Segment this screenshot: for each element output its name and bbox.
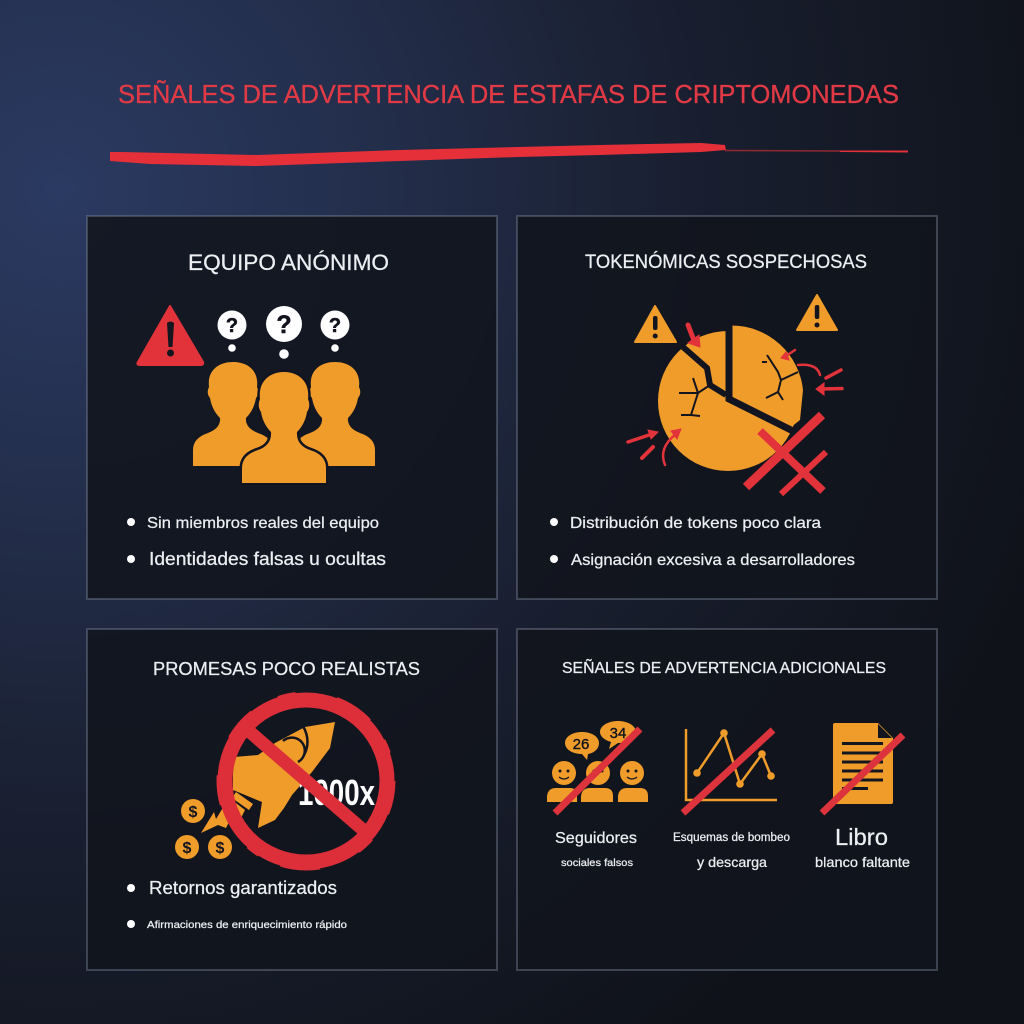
icon: rocket with coins: [175, 722, 335, 859]
caption: pump and dump: y descarga: [697, 854, 767, 870]
caption: fake followers: sociales falsos: [561, 857, 633, 869]
icon: question marks: ?: [226, 315, 238, 337]
bullet list: Identidades falsas u ocultas: [149, 549, 386, 569]
heading: SEÑALES DE ADVERTENCIA ADICIONALES: [562, 660, 886, 677]
icon: red warning triangle: [137, 306, 203, 365]
bullet list: [127, 515, 386, 569]
heading: TOKENÓMICAS SOSPECHOSAS: [585, 251, 867, 273]
heading: PROMESAS POCO REALISTAS: [153, 658, 420, 679]
icon: rocket with coins: $: [216, 840, 225, 857]
1000x label: 1000x: [298, 772, 375, 813]
bullet list: [127, 878, 347, 931]
bullet list: Distribución de tokens poco clara: [570, 515, 821, 532]
icon: cracked pie chart: [658, 320, 803, 471]
icon: question marks: ?: [329, 315, 341, 337]
bullet list: Asignación excesiva a desarrolladores: [571, 552, 855, 569]
heading: EQUIPO ANÓNIMO: [188, 250, 389, 275]
caption: missing whitepaper: [815, 824, 910, 870]
caption: pump and dump: Esquemas de bombeo: [673, 832, 790, 844]
icon: missing whitepaper: [822, 723, 903, 813]
panel: tokenómicas sospechosas: [517, 216, 937, 599]
caption: fake followers: Seguidores: [555, 830, 637, 847]
icon: rocket with coins: $: [189, 804, 198, 821]
caption: missing whitepaper: Libro: [835, 824, 888, 850]
bullet list: Afirmaciones de enriquecimiento rápido: [147, 919, 347, 931]
icon: question marks: ?: [276, 311, 292, 339]
panel: promesas poco realistas: [87, 629, 497, 970]
icon: red arrows: [628, 325, 842, 465]
bullet list: Sin miembros reales del equipo: [147, 515, 379, 532]
icon: fake followers: 34: [610, 725, 626, 742]
panel: señales adicionales: [517, 629, 937, 970]
title: SEÑALES DE ADVERTENCIA DE ESTAFAS DE CRIPTOMONEDAS: [118, 79, 899, 109]
icon: red cross marks: [746, 415, 826, 494]
icon: fake followers: [547, 721, 648, 813]
caption: missing whitepaper: blanco faltante: [815, 854, 910, 870]
bullet list: Retornos garantizados: [149, 878, 337, 898]
icon: prohibition sign: [218, 693, 394, 869]
icon: rocket with coins: $: [183, 840, 192, 857]
title brush underline: [110, 143, 908, 166]
caption: fake followers: [555, 830, 637, 869]
icon: warning triangles: [635, 295, 837, 342]
icon: fake followers: 26: [573, 736, 589, 753]
icon: pump and dump chart: [683, 729, 777, 813]
bullet list: [550, 515, 855, 569]
caption: pump and dump: [673, 832, 790, 870]
panel: equipo anónimo: [87, 216, 497, 599]
icon: question marks: [218, 306, 350, 359]
icon: three anonymous people: [193, 362, 375, 483]
